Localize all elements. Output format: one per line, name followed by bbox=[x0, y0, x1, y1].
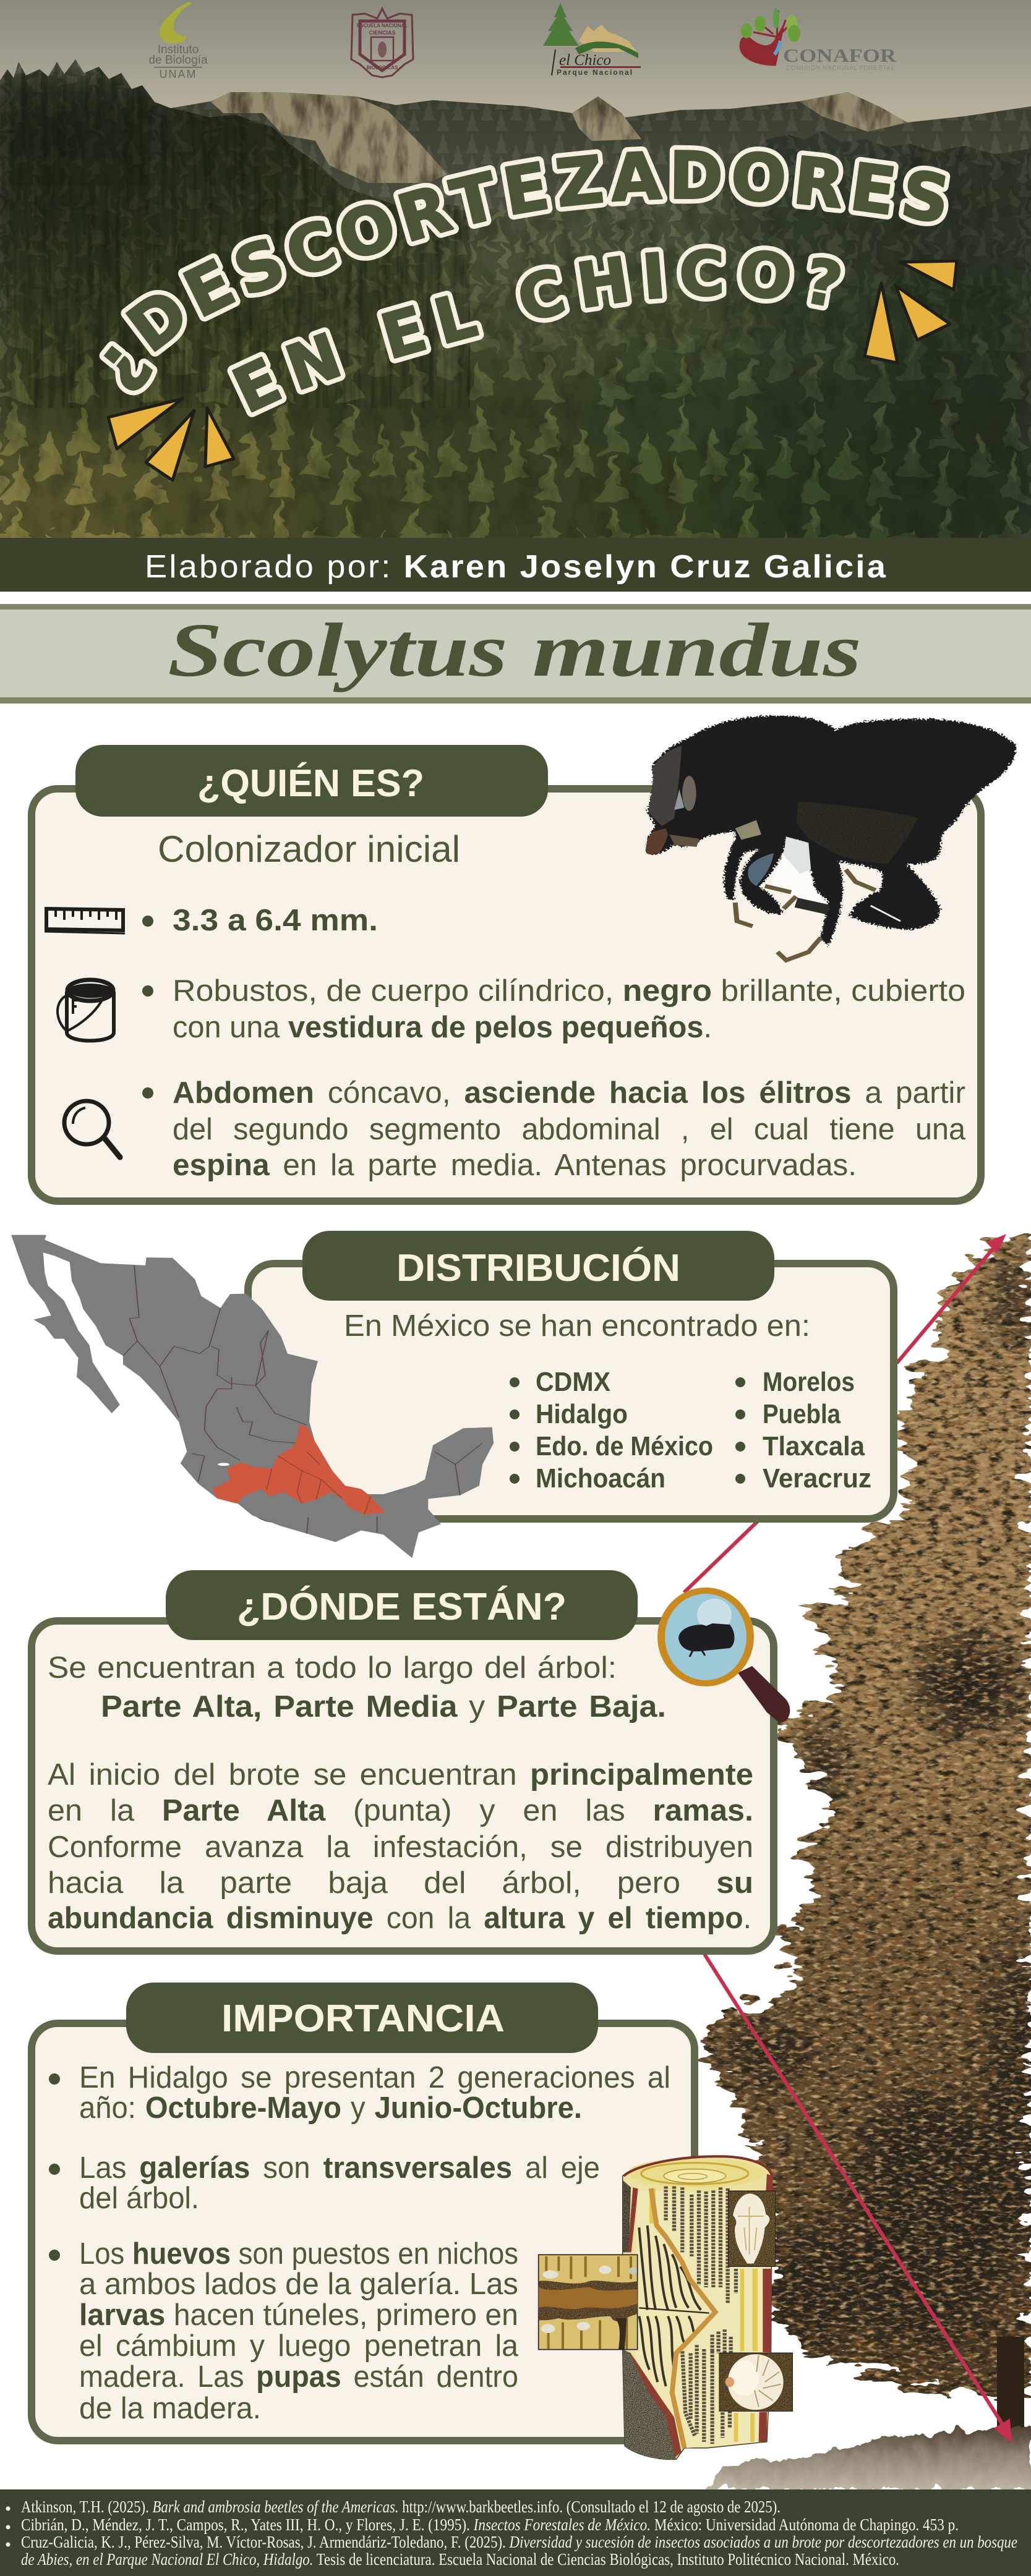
text: location details: hacia la parte baja del árbol, pero su bbox=[48, 1866, 753, 1900]
list: states right: Tlaxcala bbox=[763, 1431, 865, 1461]
text: huevos, larvas, pupas: de la madera. bbox=[79, 2392, 261, 2425]
title: ¿DESCORTEZADORES bbox=[99, 145, 950, 396]
text: colonizador inicial: Colonizador inicial bbox=[158, 828, 460, 870]
list: states right: Veracruz bbox=[763, 1463, 871, 1494]
text: location details: abundancia disminuye con la altura y el tiempo. bbox=[48, 1902, 751, 1935]
icon: yellow rays left bbox=[108, 399, 234, 480]
ground grass bbox=[707, 2426, 1031, 2489]
text: huevos, larvas, pupas bbox=[49, 2237, 519, 2425]
text: location details: Al inicio del brote se encuentran principalmente bbox=[48, 1758, 753, 1792]
species band: Scolytus mundus bbox=[168, 608, 862, 692]
text: huevos, larvas, pupas: Los huevos son puestos en nichos bbox=[79, 2237, 518, 2271]
author band bbox=[0, 538, 1031, 592]
heading: quién es: ¿QUIÉN ES? bbox=[197, 762, 424, 805]
panel: quién es bbox=[32, 715, 1016, 1201]
inset: larva bbox=[719, 2353, 793, 2412]
text: abdomen description bbox=[142, 1076, 966, 1182]
text: body description: Robustos, de cuerpo cilíndrico, negro brillante, cubierto bbox=[173, 974, 965, 1008]
header photo: forest and sky bbox=[0, 0, 1031, 538]
logo: Instituto de Biología UNAM: de Biología bbox=[148, 54, 208, 67]
text: huevos, larvas, pupas: el cámbium y luego penetran la bbox=[79, 2329, 519, 2363]
illustration: log with galleries bbox=[539, 2156, 793, 2459]
list: states right: Morelos bbox=[763, 1367, 855, 1397]
heading: distribución bbox=[302, 1231, 774, 1301]
text: size: 3.3 a 6.4 mm. bbox=[173, 904, 378, 937]
panel: distribución bbox=[248, 1231, 894, 1519]
text: location intro: Parte Alta, Parte Media y Parte Baja. bbox=[101, 1690, 666, 1724]
text: huevos, larvas, pupas: madera. Las pupas están dentro bbox=[79, 2360, 518, 2394]
list: states left: Edo. de México bbox=[536, 1431, 713, 1461]
text: generaciones: En Hidalgo se presentan 2 generaciones al bbox=[79, 2061, 670, 2094]
logo: Parque Nacional El Chico bbox=[543, 3, 641, 77]
text: generaciones bbox=[49, 2061, 670, 2125]
icon: ruler bbox=[45, 909, 125, 933]
text: generaciones: año: Octubre-Mayo y Junio-Octubre. bbox=[79, 2091, 582, 2125]
big tree bbox=[680, 1236, 1031, 2439]
text: location details bbox=[48, 1758, 753, 1935]
heading: dónde están: ¿DÓNDE ESTÁN? bbox=[237, 1586, 567, 1628]
arrow: up to treetop bbox=[684, 1235, 1005, 1592]
logo: Parque Nacional El Chico: Parque Nacional bbox=[557, 68, 633, 77]
text: intro: En México se han encontrado en: bbox=[344, 1309, 810, 1343]
icon: magnifier with beetle bbox=[657, 1588, 790, 1722]
arrow: down to tree base bbox=[704, 1954, 1011, 2442]
list: states right: Puebla bbox=[763, 1399, 841, 1429]
image: beetle bbox=[646, 715, 1016, 960]
logo: CONAFOR bbox=[740, 9, 897, 72]
text: huevos, larvas, pupas: larvas hacen túneles, primero en bbox=[79, 2298, 518, 2332]
title: EN EL CHICO? bbox=[232, 249, 841, 413]
title: ¿DESCORTEZADORES bbox=[104, 150, 946, 391]
logo: Instituto de Biología UNAM bbox=[148, 2, 208, 80]
logo: CONAFOR: COMISIÓN NACIONAL FORESTAL bbox=[786, 64, 894, 72]
logo: Escuela Nacional de Ciencias Biológicas: CIENCIAS bbox=[369, 30, 396, 36]
author band: Elaborado por: Karen Joselyn Cruz Galicia bbox=[145, 549, 888, 585]
inset: pupa bbox=[728, 2191, 776, 2267]
text: huevos, larvas, pupas: a ambos lados de la galería. Las bbox=[79, 2268, 518, 2301]
map of Mexico bbox=[11, 1235, 494, 1558]
list: states left: Michoacán bbox=[536, 1463, 665, 1494]
references footer: de Abies, en el Parque Nacional El Chico, Hidalgo. Tesis de licenciatura. Escuela Nacional de Ciencias Biológicas, Instituto Politécnico Nacional. México. bbox=[21, 2550, 899, 2569]
title: EN EL CHICO? bbox=[228, 244, 845, 417]
text: location intro bbox=[48, 1651, 666, 1724]
text: galerías: Las galerías son transversales al eje bbox=[79, 2151, 600, 2185]
species band bbox=[0, 604, 1031, 704]
panel: importancia bbox=[32, 1983, 695, 2441]
logo: Escuela Nacional de Ciencias Biológicas: ESCUELA NACIONAL bbox=[357, 23, 408, 28]
list: states right bbox=[735, 1367, 871, 1494]
text: abdomen description: espina en la parte media. Antenas procurvadas. bbox=[173, 1149, 857, 1182]
text: location intro: Se encuentran a todo lo largo del árbol: bbox=[48, 1651, 617, 1685]
text: location details: Conforme avanza la infestación, se distribuyen bbox=[48, 1830, 753, 1864]
icon: paint bucket bbox=[58, 980, 114, 1041]
text: abdomen description: Abdomen cóncavo, asciende hacia los élitros a partir bbox=[173, 1076, 965, 1110]
list: states left bbox=[510, 1367, 713, 1494]
logo: CONAFOR: CONAFOR bbox=[783, 45, 897, 66]
icon: magnifying glass bbox=[64, 1101, 120, 1157]
text: galerías: del árbol. bbox=[79, 2182, 199, 2215]
list: states left: Hidalgo bbox=[536, 1399, 628, 1429]
panel: dónde están bbox=[32, 1570, 790, 1951]
references footer: Atkinson, T.H. (2025). Bark and ambrosia beetles of the Americas. http://www.barkbeetles.info. (Consultado el 12 de agosto de 2025). bbox=[21, 2497, 781, 2516]
logo: Parque Nacional El Chico: el Chico bbox=[559, 52, 611, 69]
logo: Escuela Nacional de Ciencias Biológicas: BIOLOGICAS bbox=[367, 65, 398, 70]
logo: Escuela Nacional de Ciencias Biológicas bbox=[351, 9, 413, 77]
icon: yellow rays right bbox=[865, 261, 957, 363]
text: body description bbox=[142, 974, 965, 1044]
logo: Instituto de Biología UNAM: Instituto bbox=[158, 43, 199, 56]
heading: dónde están bbox=[166, 1570, 638, 1640]
heading: distribución: DISTRIBUCIÓN bbox=[396, 1247, 680, 1290]
heading: importancia: IMPORTANCIA bbox=[221, 1997, 505, 2040]
list: states left: CDMX bbox=[536, 1367, 610, 1397]
logo: Instituto de Biología UNAM: UNAM bbox=[160, 68, 197, 80]
text: body description: con una vestidura de pelos pequeños. bbox=[173, 1011, 712, 1044]
heading: importancia bbox=[126, 1983, 598, 2053]
text: abdomen description: del segundo segmento abdominal , el cual tiene una bbox=[173, 1113, 966, 1146]
references footer bbox=[0, 2489, 1031, 2576]
heading: quién es bbox=[75, 745, 548, 817]
text: location details: en la Parte Alta (punta) y en las ramas. bbox=[48, 1794, 753, 1827]
text: galerías bbox=[49, 2151, 600, 2215]
inset: gallery with eggs bbox=[539, 2255, 638, 2350]
references footer: Cibrián, D., Méndez, J. T., Campos, R., Yates III, H. O., y Flores, J. E. (1995). Insectos Forestales de México. México: Universidad Autónoma de Chapingo. 453 p. bbox=[21, 2515, 959, 2534]
